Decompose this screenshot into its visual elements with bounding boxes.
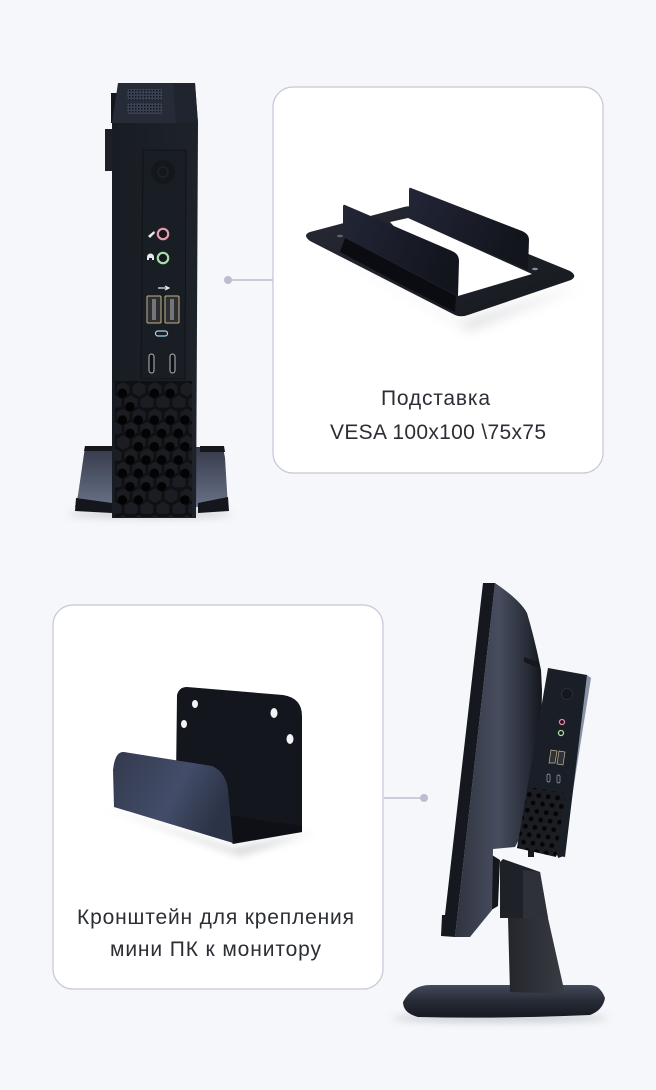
ventilation grille (115, 381, 192, 517)
floor of bracket (228, 815, 302, 843)
base shadow (392, 1014, 608, 1022)
USB-C ports (547, 774, 560, 783)
mounting slots (337, 235, 343, 237)
stand shadow (68, 510, 232, 518)
bracket edge (556, 822, 568, 858)
left fin (343, 205, 459, 296)
photo: VESA stand (306, 188, 585, 330)
USB ports (549, 750, 565, 765)
monitor stand base (403, 985, 605, 1018)
stand shadow (320, 245, 585, 330)
bracket holes (181, 700, 294, 744)
caption: VESA stand (330, 387, 546, 444)
monitor front bezel (441, 583, 495, 937)
caption: VESA stand: Подставка (381, 387, 490, 410)
monitor vent slot (524, 657, 539, 668)
PC front face (112, 123, 198, 518)
photo: monitor bracket (105, 687, 315, 856)
caption: VESA stand: VESA 100x100 \75x75 (330, 421, 546, 444)
photo: mini PC standing on VESA stand (68, 83, 232, 518)
screw (528, 850, 534, 857)
front panel (113, 752, 233, 843)
PC top (112, 83, 198, 123)
power button (562, 688, 572, 700)
stand base (75, 446, 229, 513)
bracket shadow (105, 808, 315, 856)
USB-C ports (149, 354, 175, 373)
caption: monitor bracket (77, 906, 354, 961)
PC side pieces (105, 129, 113, 171)
fin shadow on plate (340, 238, 456, 312)
connector: stand (224, 276, 273, 284)
back plate (176, 687, 302, 844)
panel: VESA stand (273, 87, 603, 473)
power button (151, 160, 175, 184)
PC grille (517, 787, 566, 857)
card (53, 605, 383, 989)
mini PC mounted (517, 668, 591, 858)
caption: monitor bracket: мини ПК к монитору (110, 938, 322, 961)
right fin (409, 188, 529, 270)
stand head (500, 859, 548, 918)
stand plate (306, 206, 574, 316)
card (273, 87, 603, 473)
caption: monitor bracket: Кронштейн для крепления (77, 906, 354, 929)
audio ports (147, 229, 168, 263)
photo: monitor with mini PC mounted (392, 583, 608, 1022)
panel: monitor bracket (53, 605, 383, 989)
monitor back (455, 583, 542, 937)
audio ports (560, 720, 564, 724)
USB-C symbol (156, 331, 168, 336)
PC side (562, 675, 591, 822)
USB ports (147, 296, 179, 323)
monitor neck (508, 918, 565, 994)
USB symbol (158, 286, 169, 290)
PC front (517, 668, 587, 857)
monitor hinge (483, 855, 500, 912)
connector: bracket (384, 794, 428, 802)
inset panel (141, 150, 186, 379)
